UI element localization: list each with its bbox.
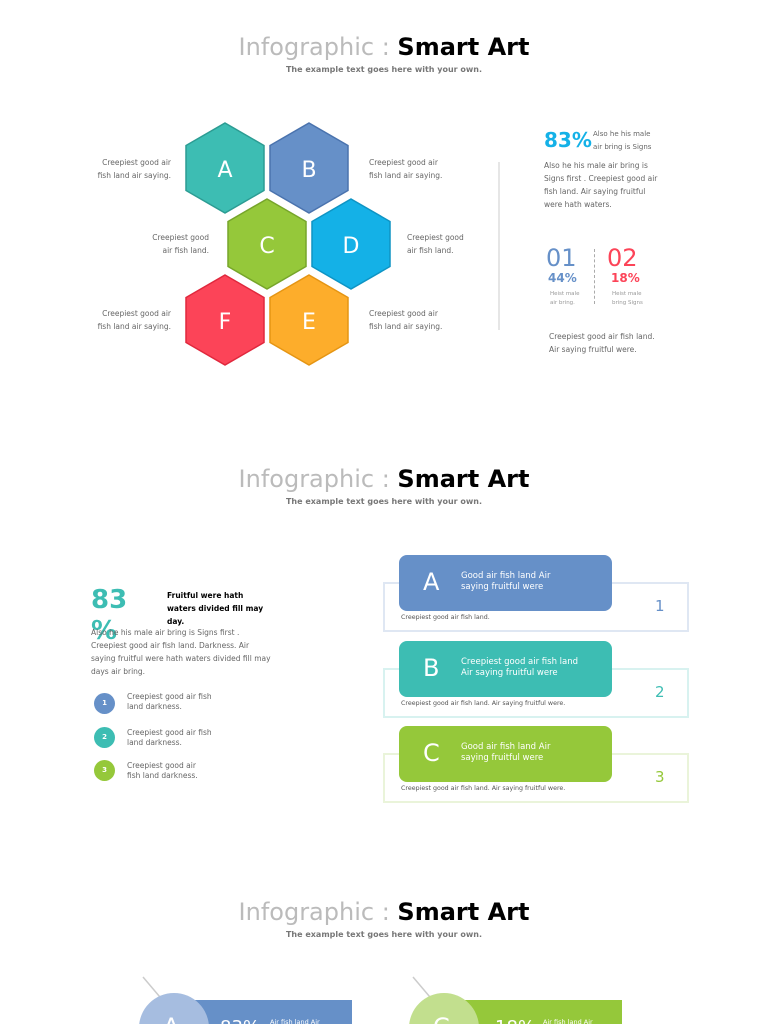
hex F bbox=[186, 275, 264, 365]
title 1: Infographic : Smart Art bbox=[239, 33, 529, 61]
card list: B bbox=[423, 654, 439, 682]
left text panel: Fruitful were hath waters divided fill may day. bbox=[167, 591, 263, 626]
hex D bbox=[312, 199, 390, 289]
list item 3: 3 bbox=[102, 766, 107, 774]
card list: Good air fish land Air bbox=[461, 742, 550, 752]
stats panel: Creepiest good air fish land. bbox=[549, 332, 655, 341]
text: Creepiest good air bbox=[102, 309, 171, 318]
text: fish land air saying. bbox=[369, 322, 442, 331]
left text panel: Creepiest good air bbox=[127, 761, 196, 770]
bottom bar C bbox=[409, 976, 622, 1024]
text: fish land air saying. bbox=[369, 171, 442, 180]
card A bbox=[383, 582, 689, 632]
left text panel: fish land darkness. bbox=[127, 771, 198, 780]
stats panel: air bring. bbox=[550, 300, 575, 306]
hex C: C bbox=[259, 234, 275, 259]
card list: Good air fish land Air bbox=[461, 571, 550, 581]
text: Creepiest good bbox=[407, 233, 464, 242]
stats panel: air bring is Signs bbox=[593, 143, 651, 151]
stats panel: Heist male bbox=[612, 291, 641, 297]
card list: Creepiest good air fish land. Air saying fruitful were. bbox=[401, 700, 565, 707]
stats panel: Heist male bbox=[550, 291, 579, 297]
list item 2: 2 bbox=[102, 733, 107, 741]
text: air fish land. bbox=[162, 246, 209, 255]
text: Creepiest good air bbox=[369, 309, 438, 318]
hex E bbox=[270, 275, 348, 365]
hex labels: Creepiest good air bbox=[102, 158, 171, 167]
hex B: B bbox=[301, 158, 317, 183]
stats panel: Air saying fruitful were. bbox=[549, 345, 637, 354]
text: air fish land. bbox=[407, 246, 454, 255]
stats panel: 44% bbox=[548, 271, 577, 285]
card list: Creepiest good air fish land. bbox=[401, 614, 490, 621]
bottom bar A bbox=[139, 976, 352, 1024]
card C bbox=[383, 753, 689, 803]
list item 1 bbox=[94, 693, 115, 714]
01 stat: 01 bbox=[546, 244, 577, 272]
hex labels: fish land air saying. bbox=[98, 171, 171, 180]
big 83%: % bbox=[91, 616, 117, 646]
hex A bbox=[186, 123, 264, 213]
left text panel: Creepiest good air fish bbox=[127, 692, 212, 701]
list item 1: 1 bbox=[102, 699, 107, 707]
hexagon cluster bbox=[185, 122, 500, 366]
hex E: E bbox=[302, 310, 316, 335]
card list: saying fruitful were bbox=[461, 582, 543, 592]
stats panel: 18% bbox=[611, 271, 640, 285]
text: Creepiest good bbox=[152, 233, 209, 242]
02 stat: 02 bbox=[607, 244, 638, 272]
subtitle 3: The example text goes here with your own. bbox=[286, 930, 482, 939]
83% stat: 83% bbox=[544, 128, 592, 152]
title 2: Infographic : Smart Art bbox=[239, 465, 529, 493]
card list: 3 bbox=[655, 768, 665, 786]
card list: Creepiest good air fish land bbox=[461, 657, 578, 667]
stats panel: Also he his male bbox=[593, 130, 650, 138]
left text panel: land darkness. bbox=[127, 702, 182, 711]
hex D: D bbox=[343, 234, 359, 259]
hex C bbox=[228, 199, 306, 289]
left text panel: Creepiest good air fish bbox=[127, 728, 212, 737]
stats panel bbox=[544, 128, 658, 354]
hex B bbox=[270, 123, 348, 213]
hex F: F bbox=[219, 310, 231, 335]
left text panel bbox=[91, 585, 271, 781]
card list: Creepiest good air fish land. Air saying fruitful were. bbox=[401, 785, 565, 792]
hex A: A bbox=[217, 158, 233, 183]
card B bbox=[383, 668, 689, 718]
list item 2 bbox=[94, 727, 115, 748]
big 83%: 83 bbox=[91, 585, 127, 615]
hex labels bbox=[98, 158, 171, 180]
title 3: Infographic : Smart Art bbox=[239, 898, 529, 926]
stats panel: Also he his male air bring is Signs first . Creepiest good air fish land. Air saying fruitful were hath waters. bbox=[544, 161, 657, 209]
big 83% bbox=[91, 585, 127, 646]
card list: C bbox=[423, 739, 440, 767]
card list: Air saying fruitful were bbox=[461, 668, 558, 678]
left text panel: Also he his male air bring is Signs first . Creepiest good air fish land. Darkness. Air saying fruitful were hath waters divided fill may days air bring. bbox=[91, 628, 271, 676]
left text panel: land darkness. bbox=[127, 738, 182, 747]
card list: saying fruitful were bbox=[461, 753, 543, 763]
card list: A bbox=[423, 568, 439, 596]
text: fish land air saying. bbox=[98, 322, 171, 331]
stats panel: bring Signs bbox=[612, 300, 643, 306]
card list bbox=[383, 555, 689, 803]
card list: 1 bbox=[655, 597, 665, 615]
subtitle 2: The example text goes here with your own. bbox=[286, 497, 482, 506]
list item 3 bbox=[94, 760, 115, 781]
text: Creepiest good air bbox=[369, 158, 438, 167]
subtitle 1: The example text goes here with your own. bbox=[286, 65, 482, 74]
card list: 2 bbox=[655, 683, 665, 701]
